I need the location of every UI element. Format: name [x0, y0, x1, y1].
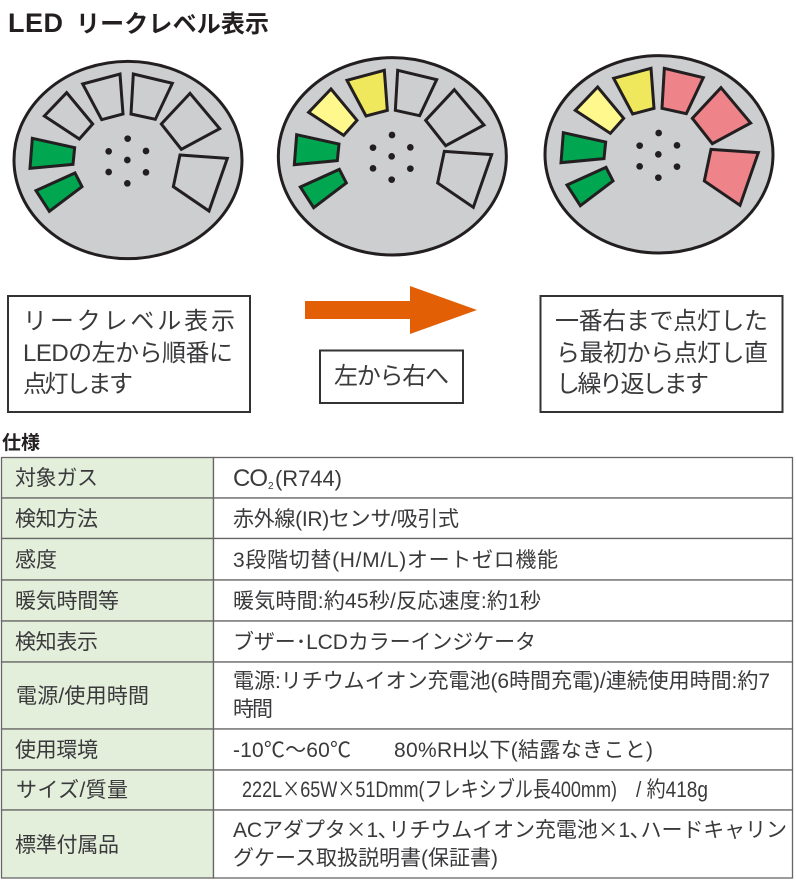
- row: sensitivity: 3段階切替(H/M/L)オートゼロ機能: [233, 549, 558, 572]
- row: standard accessories: 標準付属品: [15, 834, 119, 857]
- callout: left description: LEDの左から順番に: [23, 340, 233, 367]
- row: standard accessories: グケース取扱説明書(保証書): [233, 847, 498, 870]
- arrow: left to right: [305, 286, 477, 334]
- callout: left description: 点灯します: [23, 371, 133, 398]
- row: warm-up time: 暖気時間:約45秒/反応速度:約1秒: [233, 590, 541, 613]
- row: standard accessories: [2, 810, 792, 878]
- row: standard accessories: ACアダプタ×1､リチウムイオン充電池×1､ハードキャリン: [233, 814, 787, 844]
- row: detection display: ブザー･LCDカラーインジケータ: [233, 631, 536, 654]
- callout: left description: リークレベル表示: [23, 308, 235, 335]
- callout: left description: [8, 296, 250, 412]
- row: sensitivity: 感度: [15, 549, 57, 572]
- heading: specifications: 仕様: [2, 432, 40, 454]
- row: detection display: [2, 621, 792, 662]
- row: operating environment: -10℃～60℃: [233, 739, 351, 762]
- title: リークレベル表示: [76, 11, 269, 38]
- row: detection display: 検知表示: [15, 631, 98, 654]
- callout: left to right label: [320, 350, 463, 403]
- row: operating environment: 80%RH以下(結露なきこと): [394, 739, 653, 762]
- row: power and run time: 時間: [233, 698, 273, 721]
- row: power and run time: 電源:リチウムイオン充電池(6時間充電)/連続使用時間:約7: [233, 670, 770, 693]
- row: power and run time: [2, 662, 792, 729]
- row: target gas: 2: [268, 481, 274, 492]
- row: detection method: [2, 498, 792, 538]
- row: size and weight: サイズ/質量: [16, 779, 128, 802]
- row: detection method: 赤外線(IR)センサ/吸引式: [233, 508, 459, 531]
- title: [8, 8, 269, 38]
- LED disc: green and yellow segments lit: [278, 58, 506, 255]
- LED disc: all segments lit: [545, 56, 773, 253]
- row: warm-up time: 暖気時間等: [15, 590, 119, 613]
- row: warm-up time: [2, 580, 792, 621]
- row: sensitivity: [2, 538, 792, 580]
- row: size and weight: / 約418g: [636, 777, 708, 802]
- row: power and run time: 電源/使用時間: [16, 685, 149, 708]
- row: operating environment: 使用環境: [15, 739, 98, 762]
- callout: right description: し繰り返します: [556, 371, 709, 398]
- LED disc: two green segments lit: [14, 61, 242, 259]
- callout: right description: [540, 296, 782, 412]
- specification table: [2, 458, 792, 878]
- row: detection method: 検知方法: [15, 508, 98, 531]
- row: target gas: 対象ガス: [15, 467, 98, 490]
- title: LED: [8, 8, 63, 38]
- callout: right description: ら最初から点灯し直: [556, 340, 768, 367]
- row: size and weight: 222L×65W×51Dmm(フレキシブル長400mm): [242, 772, 617, 804]
- callout: left to right label: 左から右へ: [334, 363, 449, 390]
- row: size and weight: [2, 770, 792, 810]
- callout: right description: 一番右まで点灯した: [555, 308, 768, 335]
- row: target gas: (R744): [275, 466, 342, 491]
- row: operating environment: [2, 729, 792, 770]
- row: target gas: CO: [233, 465, 268, 492]
- row: target gas: [2, 458, 792, 498]
